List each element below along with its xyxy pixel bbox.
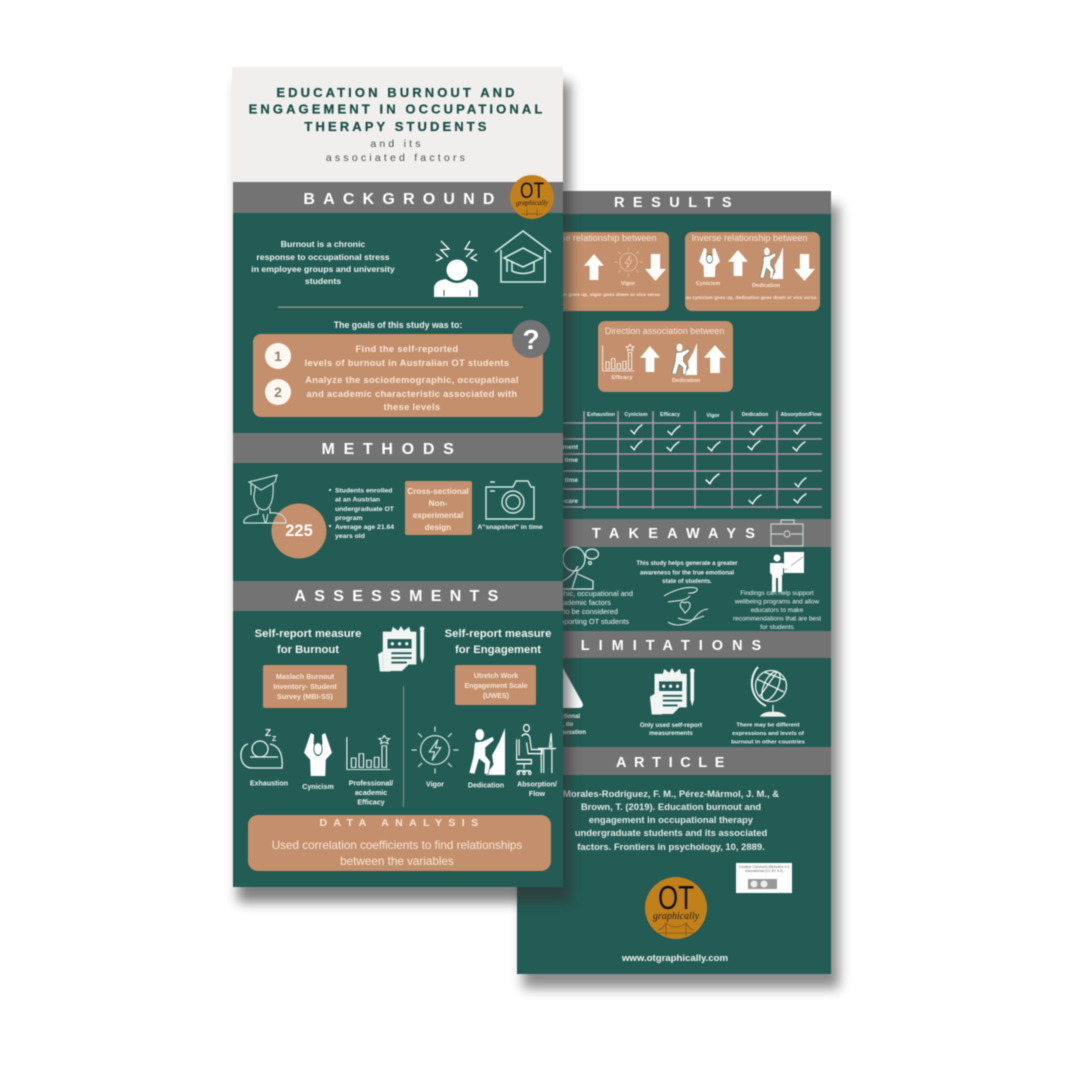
title block: ENGAGEMENT IN OCCUPATIONAL: [249, 102, 545, 116]
goal number 2: 2: [274, 384, 282, 400]
text: burnout definition: Burnout is a chronic: [281, 239, 365, 249]
citation: factors. Frontiers in psychology, 10, 2889.: [577, 842, 765, 853]
text: other countries limitation: [731, 722, 806, 746]
results table: [539, 411, 822, 509]
icon: camera: [486, 481, 534, 519]
text: sociodemographic factors: when supporting OT students: [532, 617, 629, 626]
logo: OT graphically small: graphically: [516, 199, 549, 207]
results heading bar: RESULTS: [614, 195, 740, 211]
goal text: these levels: [384, 401, 440, 412]
card: inverse cynicism and dedication: as cynicism goes up, dedication goes down or vice versa: [686, 295, 817, 301]
icon: exhaustion: [241, 728, 282, 768]
box: UWES: Engagement Scale: [464, 682, 528, 690]
text: cross-sectional limitation: [530, 714, 586, 736]
results table: Vigor: [706, 413, 720, 419]
icon: thinking person: [563, 547, 598, 589]
right panel shadow: [523, 205, 839, 988]
citation: Brown, T. (2019). Education burnout and: [581, 802, 761, 813]
methods heading bar: METHODS: [322, 441, 462, 458]
icon labels: [250, 780, 557, 806]
results table: Employment: [539, 444, 579, 451]
text: sample description: [329, 488, 395, 540]
title block: associated factors: [326, 152, 468, 164]
icon: briefcase: [771, 520, 803, 546]
takeaways heading bar: [517, 519, 831, 547]
box: data analysis: Used correlation coefficients to find relationships: [272, 839, 522, 852]
logo: OT graphically: [645, 877, 707, 939]
card: inverse cynicism and dedication: [685, 232, 820, 311]
goal number 2: [265, 379, 291, 405]
box: UWES: (UWES): [483, 692, 510, 700]
goals box: [253, 334, 543, 417]
background heading bar: [233, 182, 563, 213]
title block: [232, 67, 563, 182]
text: other countries limitation: expressions and levels of: [732, 731, 804, 737]
results table: Efficacy: [660, 412, 680, 418]
section: assessments: [233, 581, 563, 871]
text: sample description: Students enrolled: [335, 488, 392, 494]
box: study design: [405, 481, 472, 535]
box: study design: Cross-sectional: [407, 487, 469, 496]
text: sample description: Average age 21.64: [335, 524, 394, 531]
text: awareness: state of students.: [662, 579, 712, 585]
takeaways heading bar: TAKEAWAYS: [592, 526, 764, 542]
icon: vigor: [411, 726, 459, 774]
box: data analysis: between the variables: [340, 855, 454, 868]
box: MBI-SS: Survey (MBI-SS): [277, 692, 334, 701]
box: MBI-SS: Inventory- Student: [273, 682, 337, 691]
left panel shadow: [238, 82, 570, 902]
card: inverse cynicism and dedication: Cynicism: [696, 281, 720, 287]
icon: graduate: [244, 475, 286, 523]
icon: self-report clipboard: [378, 626, 425, 672]
title block: THERAPY STUDENTS: [304, 119, 490, 134]
icon: dedication: [469, 728, 505, 775]
text: awareness: [636, 561, 738, 585]
citation: engagement in occupational therapy: [589, 815, 754, 826]
citation: undergraduate students and its associated: [575, 828, 767, 839]
text: engagement measure heading: [445, 628, 551, 656]
section: methods: [233, 433, 563, 558]
card: inverse exhaustion and vigor: [534, 232, 669, 311]
text: burnout definition: response to occupational stress: [256, 252, 390, 262]
text: burnout measure heading: for Burnout: [277, 644, 339, 656]
article heading bar: [517, 747, 831, 775]
panel: left infographic page: [232, 67, 563, 887]
box: UWES: Utretch Work: [474, 672, 518, 680]
icon: exhaustion: Z: [272, 736, 277, 743]
card: direct association efficacy and dedication: Efficacy: [611, 375, 633, 381]
card: inverse exhaustion and vigor: Inverse relationship between: [541, 233, 656, 243]
section: article: [517, 747, 831, 964]
results table: Part time: [550, 477, 578, 484]
icon: teacher at board: [770, 552, 804, 592]
text: self-report limitation: Only used self-report: [640, 722, 702, 729]
results heading bar: [517, 191, 831, 214]
text: burnout definition: students: [305, 276, 341, 286]
assessments heading bar: ASSESSMENTS: [294, 588, 507, 605]
background heading bar: BACKGROUND: [303, 191, 503, 208]
text: sociodemographic factors: Sociodemographic, occupational and: [512, 589, 633, 598]
left panel background: [233, 182, 563, 887]
circle with 225: [272, 504, 326, 558]
icon: exhaustion: Z: [265, 728, 271, 739]
text: burnout measure heading: Self-report measure: [255, 628, 361, 640]
text: sociodemographic factors: [512, 589, 633, 626]
results table: Self-care: [551, 498, 578, 505]
icon: efficacy: [347, 735, 390, 770]
box: study design: design: [425, 523, 451, 532]
text: findings: for students: [760, 624, 794, 631]
box: data analysis: [248, 815, 551, 871]
text: cross-sectional limitation: not show causation: [530, 730, 586, 736]
icon labels: academic: [355, 789, 387, 797]
icon: globe: [752, 667, 786, 716]
section: takeaways: [512, 519, 831, 631]
icon: house with graduation cap: [495, 231, 551, 282]
text: self-report limitation: [640, 722, 702, 737]
text: snapshot: A"snapshot" in time: [477, 524, 543, 531]
results table: Full time: [551, 457, 578, 464]
section: background: [233, 175, 563, 417]
website url: www.otgraphically.com: [621, 953, 728, 964]
text: sociodemographic factors: and academic factors: [541, 598, 611, 607]
text: burnout measure heading: [255, 628, 361, 656]
icon labels: Vigor: [426, 780, 444, 788]
text: cross-sectional limitation: design, do: [543, 722, 573, 728]
goal text: [305, 343, 519, 412]
box: UWES: [455, 665, 536, 705]
text: goals heading: The goals of this study was to:: [334, 320, 462, 330]
logo: OT graphically small: OT: [520, 178, 544, 203]
limitations heading bar: [517, 631, 831, 658]
text: sample description: undergraduate OT: [335, 506, 395, 513]
title block: EDUCATION BURNOUT AND: [276, 85, 518, 100]
box: MBI-SS: [263, 665, 347, 708]
limitations heading bar: LIMITATIONS: [581, 638, 770, 654]
goal text: Analyze the sociodemographic, occupational: [305, 374, 519, 385]
text: findings: Findings can help support: [740, 590, 814, 597]
text: sample description: years old: [335, 533, 365, 540]
text: sample description: program: [335, 515, 363, 522]
text: findings: recommendations that are best: [733, 616, 821, 622]
text: engagement measure heading: for Engagement: [455, 644, 541, 656]
icon: question mark: ?: [522, 324, 540, 355]
logo: OT graphically small: [510, 175, 554, 219]
icon: absorption: [517, 725, 556, 774]
citation: [563, 789, 779, 853]
icon labels: Exhaustion: [250, 780, 288, 788]
text: awareness: awareness for the true emotional: [640, 570, 734, 576]
icon: triangle: [563, 668, 583, 708]
card: inverse exhaustion and vigor: Vigor: [621, 281, 636, 287]
text: self-report limitation: measurements: [649, 730, 693, 737]
citation: Morales-Rodríguez, F. M., Pérez-Mármol, J. M., &: [563, 789, 779, 800]
creative commons badge: [736, 863, 792, 893]
card: inverse cynicism and dedication: Inverse relationship between: [692, 233, 807, 243]
creative commons badge: International (CC BY 4.0): [745, 869, 783, 873]
icon labels: Cynicism: [302, 783, 334, 791]
title block: and its: [370, 138, 424, 150]
text: findings: wellbeing programs and allow: [734, 598, 819, 606]
text: other countries limitation: There may be different: [736, 722, 800, 728]
icon labels: Professional/: [349, 780, 393, 788]
box: MBI-SS: Maslach Burnout: [276, 672, 335, 681]
icon: cynicism: [304, 733, 332, 776]
assessments heading bar: [233, 581, 563, 611]
results table: Cynicism: [624, 412, 648, 418]
card: inverse cynicism and dedication: Dedication: [752, 283, 781, 289]
text: sociodemographic factors: need to be considered: [545, 607, 618, 616]
panel: right infographic page: [512, 191, 839, 988]
goal text: levels of burnout in Australian OT students: [305, 357, 509, 368]
creative commons badge: Creative Commons Attribution 4.0: [739, 865, 789, 869]
text: other countries limitation: burnout in other countries: [731, 740, 806, 746]
card: direct association efficacy and dedication: [598, 321, 733, 392]
goal number 1: [265, 343, 291, 369]
box: data analysis: DATA ANALYSIS: [319, 817, 485, 829]
text: awareness: This study helps generate a greater: [636, 561, 738, 567]
goal text: and academic characteristic associated with: [307, 388, 517, 399]
goal text: Find the self-reported: [356, 343, 458, 354]
card: inverse exhaustion and vigor: As exhaustion goes up, vigor goes down or vice versa: [534, 292, 660, 298]
text: sample description: at an Austrian: [335, 496, 380, 504]
section: limitations: [517, 631, 831, 746]
article heading bar: ARTICLE: [616, 755, 732, 771]
number 225: 225: [285, 522, 313, 540]
icon: hands and heart: [664, 587, 708, 625]
icon: self-report clipboard: [650, 668, 695, 715]
logo: OT graphically: graphically: [653, 911, 700, 922]
icon labels: Efficacy: [357, 798, 385, 806]
right panel background: [517, 191, 831, 974]
box: study design: experimental: [413, 511, 463, 520]
card: direct association efficacy and dedication: Direction association between: [605, 326, 724, 336]
icon labels: Flow: [529, 790, 546, 798]
text: findings: [733, 590, 821, 631]
text: cross-sectional limitation: Cross-sectional: [535, 714, 580, 720]
icon labels: Absorption/: [517, 780, 557, 788]
results table: Exhaustion: [587, 412, 615, 418]
methods heading bar: [233, 433, 563, 463]
text: findings: educators to make: [751, 607, 804, 614]
text: engagement measure heading: Self-report measure: [445, 628, 551, 640]
text: burnout definition: in employee groups and university: [251, 264, 395, 274]
section: results: [517, 191, 831, 509]
logo: OT graphically: OT: [658, 879, 694, 916]
results table: Absorption/Flow: [781, 412, 822, 418]
icon: stressed person: [434, 241, 478, 297]
card: direct association efficacy and dedication: Dedication: [672, 378, 701, 384]
results table: Dedication: [742, 412, 768, 418]
icon: question mark: [512, 320, 550, 358]
text: burnout definition: [251, 239, 395, 286]
box: study design: Non-: [429, 499, 448, 508]
goal number 1: 1: [274, 348, 282, 364]
icon labels: Dedication: [468, 782, 504, 790]
